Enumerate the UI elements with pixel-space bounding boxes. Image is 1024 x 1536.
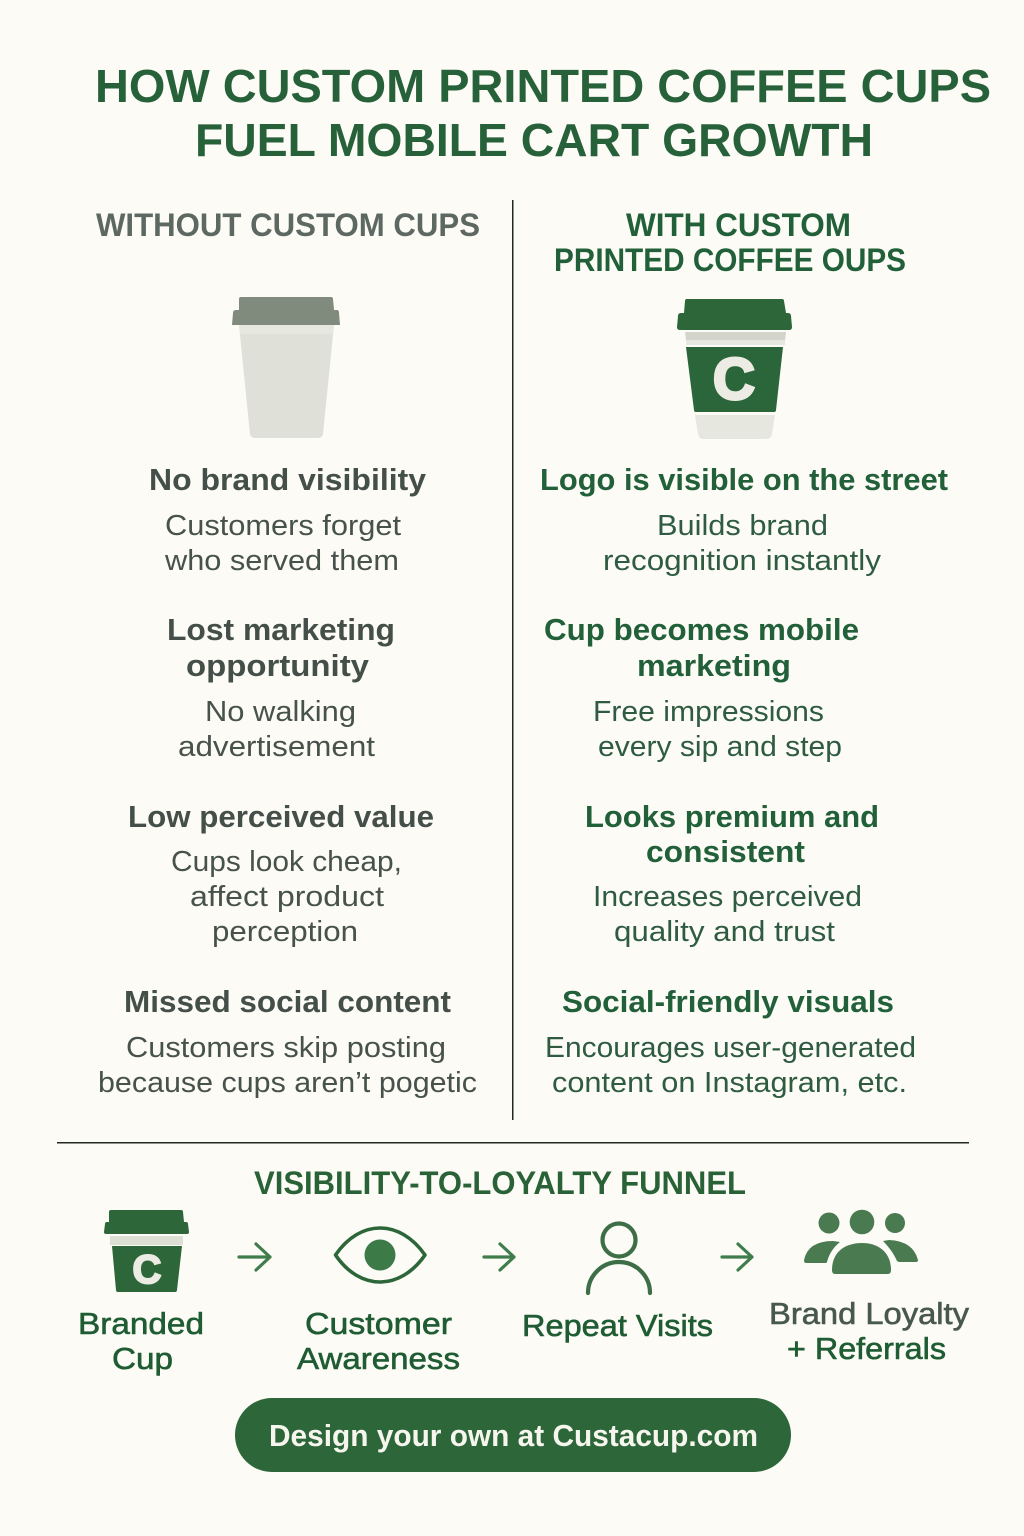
item: low perceived value: Cups look cheap, <box>171 846 402 878</box>
item: logo is visible: recognition instantly <box>603 545 882 577</box>
icon: branded cup: C <box>713 347 755 412</box>
icon: person <box>588 1224 650 1293</box>
item: looks premium and consistent: quality and trust <box>614 916 835 948</box>
item: no brand visibility: who served them <box>164 545 399 577</box>
heading: with custom printed coffee cups: WITH CUSTOM <box>626 207 851 243</box>
item: social-friendly visuals: content on Instagram, etc. <box>552 1067 907 1099</box>
item: logo is visible: Logo is visible on the street <box>540 462 948 497</box>
label: brand loyalty + referrals: + Referrals <box>787 1331 946 1366</box>
item: lost marketing opportunity: Lost marketing <box>167 612 395 647</box>
item: logo is visible: Builds brand <box>657 510 828 542</box>
arrow 2 <box>484 1244 514 1270</box>
call to action button: Design your own at Custacup.com <box>269 1418 758 1453</box>
item: cup becomes mobile marketing: Free impressions <box>593 696 824 728</box>
item: missed social content <box>98 984 477 1099</box>
item: low perceived value: Low perceived value <box>128 799 434 834</box>
item: low perceived value: affect product <box>190 881 384 913</box>
item: social-friendly visuals <box>545 984 916 1099</box>
item: low perceived value: perception <box>212 916 358 948</box>
label: branded cup: Branded <box>78 1306 204 1341</box>
item: looks premium and consistent: consistent <box>646 834 805 869</box>
icon: branded cup <box>677 299 792 439</box>
item: cup becomes mobile marketing: Cup becomes mobile <box>544 612 859 647</box>
title: FUEL MOBILE CART GROWTH <box>195 114 873 166</box>
item: social-friendly visuals: Encourages user-generated <box>545 1032 916 1064</box>
icon: branded cup small <box>104 1210 189 1292</box>
arrow 1 <box>239 1244 270 1270</box>
item: low perceived value <box>128 799 434 948</box>
panel: funnel <box>78 1165 970 1376</box>
funnel heading: VISIBILITY-TO-LOYALTY FUNNEL <box>254 1165 746 1201</box>
item: missed social content: because cups aren’t pogetic <box>98 1067 477 1099</box>
item: looks premium and consistent: Looks premium and <box>585 799 879 834</box>
item: no brand visibility: No brand visibility <box>149 462 427 497</box>
item: logo is visible <box>540 462 948 577</box>
panel: without custom cups <box>96 207 480 1099</box>
icon: eye <box>336 1228 425 1282</box>
item: missed social content: Missed social content <box>124 984 451 1019</box>
title: HOW CUSTOM PRINTED COFFEE CUPS <box>95 60 991 112</box>
item: lost marketing opportunity <box>167 612 395 763</box>
center divider <box>512 200 514 1120</box>
item: looks premium and consistent <box>585 799 879 948</box>
arrow 3 <box>722 1244 752 1270</box>
call to action button <box>235 1398 791 1472</box>
item: cup becomes mobile marketing: marketing <box>637 648 791 683</box>
label: customer awareness: Awareness <box>297 1341 460 1376</box>
item: social-friendly visuals: Social-friendly visuals <box>562 984 894 1019</box>
title <box>95 60 991 166</box>
item: lost marketing opportunity: opportunity <box>186 648 370 683</box>
item: no brand visibility <box>149 462 427 577</box>
label: repeat visits: Repeat Visits <box>522 1308 713 1343</box>
label: branded cup: Cup <box>112 1341 173 1376</box>
label: brand loyalty + referrals <box>769 1296 970 1366</box>
item: lost marketing opportunity: No walking <box>205 696 356 728</box>
heading: without custom cups: WITHOUT CUSTOM CUPS <box>96 207 480 243</box>
label: customer awareness: Customer <box>305 1306 452 1341</box>
panel: with custom cups <box>540 207 948 1099</box>
horizontal divider <box>57 1142 969 1144</box>
label: customer awareness <box>297 1306 460 1376</box>
icon: group <box>804 1210 918 1274</box>
item: no brand visibility: Customers forget <box>165 510 401 542</box>
item: looks premium and consistent: Increases perceived <box>593 881 862 913</box>
item: missed social content: Customers skip posting <box>126 1032 446 1064</box>
icon: plain cup <box>232 297 340 438</box>
heading: with custom printed coffee cups <box>554 207 906 278</box>
item: cup becomes mobile marketing: every sip and step <box>598 731 842 763</box>
item: lost marketing opportunity: advertisement <box>178 731 375 763</box>
item: cup becomes mobile marketing <box>544 612 859 763</box>
label: brand loyalty + referrals: Brand Loyalty <box>769 1296 970 1331</box>
heading: with custom printed coffee cups: PRINTED COFFEE OUPS <box>554 242 906 278</box>
label: branded cup <box>78 1306 204 1376</box>
icon: branded cup small: C <box>133 1248 161 1292</box>
